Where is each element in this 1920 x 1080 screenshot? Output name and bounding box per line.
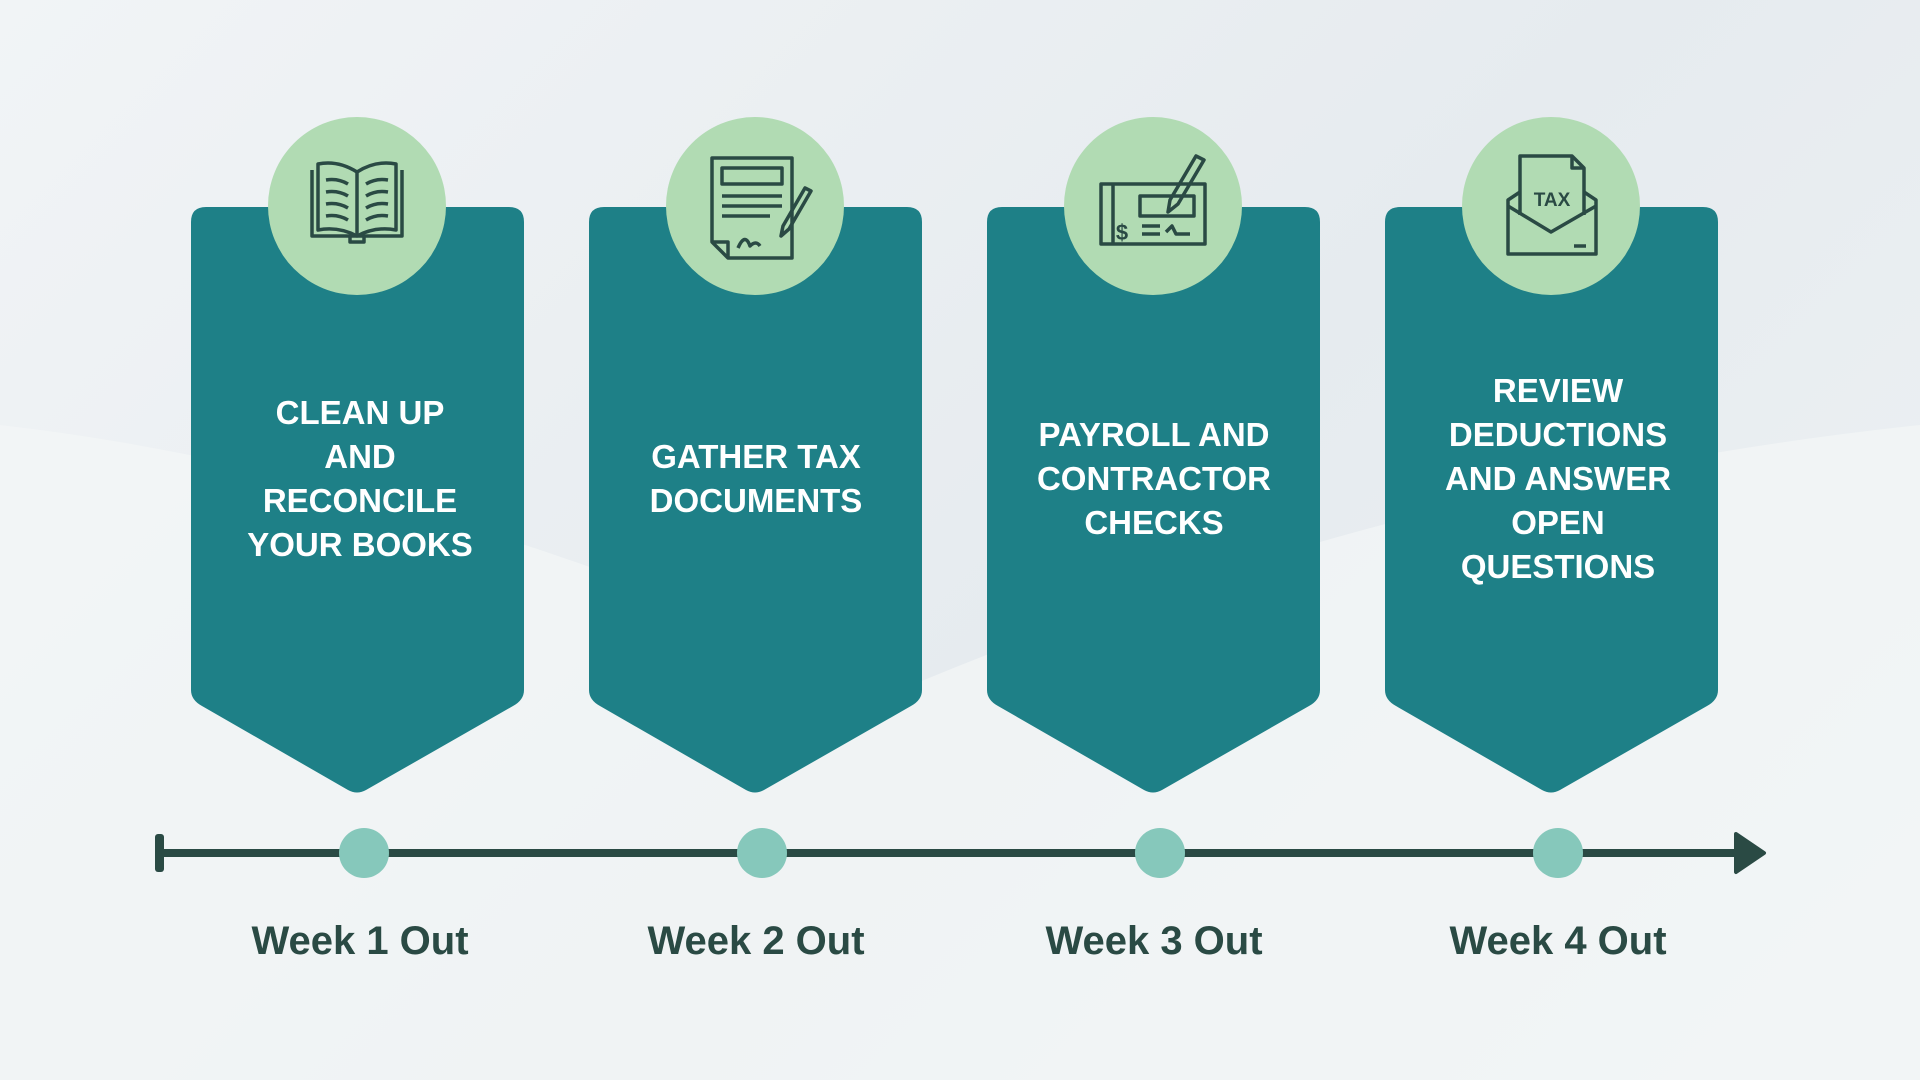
week labels: Week 1 Out	[251, 919, 469, 963]
card 4 text: QUESTIONS	[1461, 548, 1655, 585]
card 4 text: AND ANSWER	[1445, 460, 1671, 497]
icon circle: book	[268, 117, 446, 295]
card 2	[589, 117, 922, 792]
timeline arrow	[155, 834, 1764, 872]
week labels: Week 4 Out	[1449, 919, 1667, 963]
card 1 text: CLEAN UP	[276, 394, 444, 431]
card 3 text: CHECKS	[1084, 504, 1224, 541]
card 3 text: CONTRACTOR	[1037, 460, 1271, 497]
icon circle: check: $	[1116, 220, 1128, 245]
card 1	[191, 117, 524, 792]
card 1 text: YOUR BOOKS	[247, 526, 473, 563]
icon circle: tax envelope	[1462, 117, 1640, 295]
card 2 text: GATHER TAX	[651, 438, 861, 475]
timeline dots	[339, 828, 1583, 878]
card 2 text: DOCUMENTS	[650, 482, 862, 519]
icon circle: document	[666, 117, 844, 295]
week labels: Week 2 Out	[647, 919, 865, 963]
icon circle: check	[1064, 117, 1242, 295]
card 1 text: RECONCILE	[263, 482, 457, 519]
card 4 text: REVIEW	[1493, 372, 1624, 409]
card 4 text: OPEN	[1511, 504, 1605, 541]
card 3	[987, 117, 1320, 792]
card 4 text: DEDUCTIONS	[1449, 416, 1667, 453]
week labels	[251, 919, 1667, 963]
icon circle: tax envelope: TAX	[1534, 190, 1571, 211]
card 3 text: PAYROLL AND	[1038, 416, 1270, 453]
card 4	[1385, 117, 1718, 792]
week labels: Week 3 Out	[1045, 919, 1263, 963]
card 1 text: AND	[324, 438, 396, 475]
